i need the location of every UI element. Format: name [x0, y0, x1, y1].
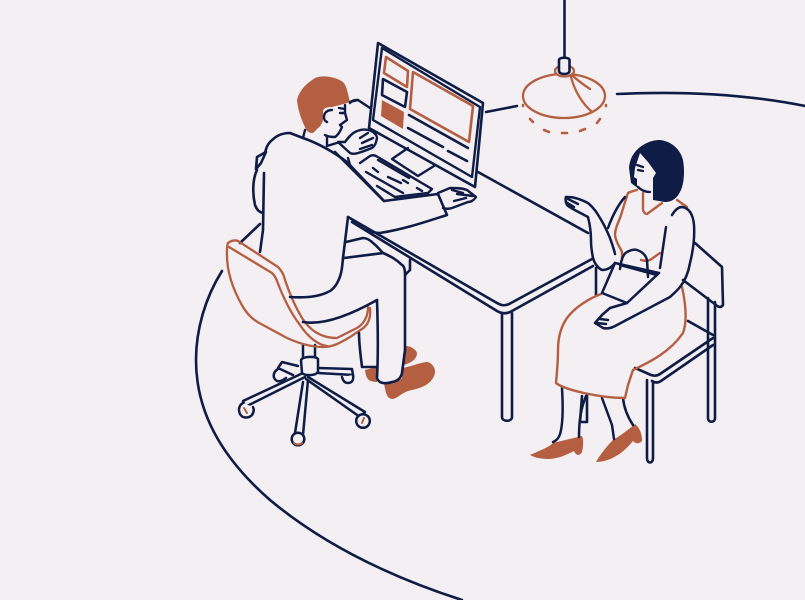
woman seated [530, 140, 694, 462]
pendant lamp [486, 0, 606, 133]
visitor chair [580, 243, 723, 462]
hair [297, 76, 350, 133]
desk [348, 172, 596, 421]
man at computer [253, 76, 476, 399]
woman legs [553, 388, 633, 442]
legs and jacket [253, 133, 447, 383]
face [303, 100, 358, 146]
keyboard [360, 155, 432, 197]
hands [327, 100, 476, 209]
shoes [530, 424, 642, 462]
shoes [365, 346, 435, 399]
chair base [239, 345, 370, 445]
dress [556, 190, 687, 398]
computer monitor [369, 43, 483, 187]
floor circle arc [196, 93, 805, 600]
hair [629, 140, 684, 202]
office chair [227, 240, 370, 445]
arms and bag [566, 197, 694, 328]
face [637, 165, 650, 192]
chair shell [227, 240, 370, 347]
